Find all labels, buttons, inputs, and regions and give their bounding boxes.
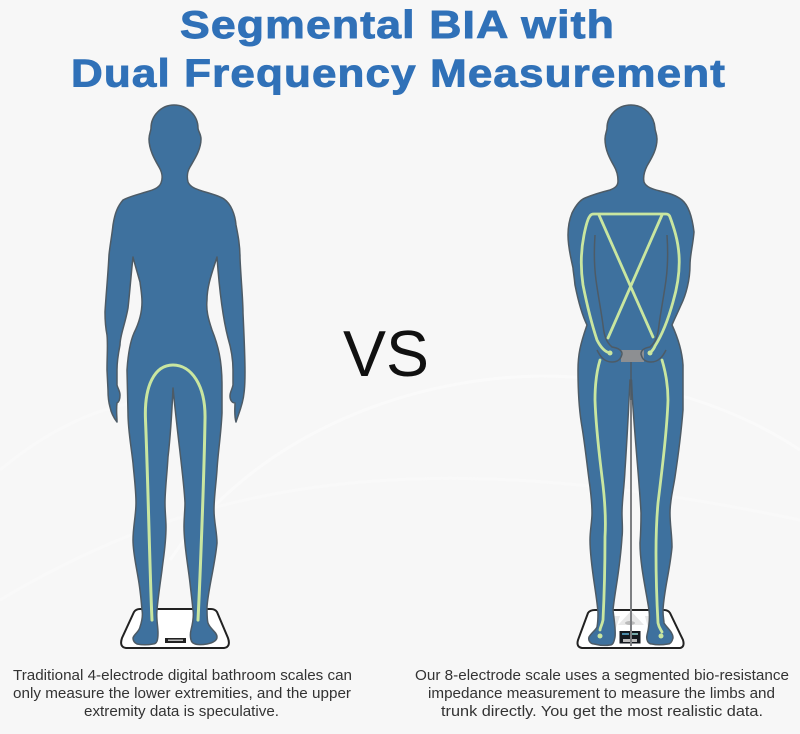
caption left xyxy=(13,668,352,720)
panel: traditional 4-electrode scale figure xyxy=(105,105,245,648)
center line xyxy=(630,360,632,646)
caption left: extremity data is speculative. xyxy=(84,704,279,720)
icon: bathroom scale, left xyxy=(121,609,229,648)
panel: 8-electrode scale figure xyxy=(568,105,694,648)
caption left: only measure the lower extremities, and the upper xyxy=(13,686,351,702)
title: Segmental BIA with xyxy=(180,4,615,47)
caption right: trunk directly. You get the most realistic data. xyxy=(441,704,763,720)
caption right: impedance measurement to measure the limbs and xyxy=(428,686,775,702)
title: Dual Frequency Measurement xyxy=(71,52,726,96)
body silhouette, left xyxy=(105,105,245,645)
shoulder bar and arm circuit xyxy=(581,214,679,353)
caption left: Traditional 4-electrode digital bathroom scales can xyxy=(13,668,352,684)
leg lines xyxy=(595,360,668,632)
current paths, right xyxy=(581,214,679,632)
title xyxy=(71,4,726,96)
cross lines xyxy=(599,215,662,338)
arms and hands, inner outlines xyxy=(594,235,668,400)
electrode dots xyxy=(598,350,664,638)
caption right: Our 8-electrode scale uses a segmented bio-resistance xyxy=(415,668,789,684)
current path, left xyxy=(145,365,205,620)
caption right xyxy=(415,668,789,720)
body silhouette, right xyxy=(568,105,694,645)
VS label: VS xyxy=(343,317,429,390)
icon: bathroom scale, right xyxy=(578,610,684,648)
icon: handle grip xyxy=(621,350,644,362)
